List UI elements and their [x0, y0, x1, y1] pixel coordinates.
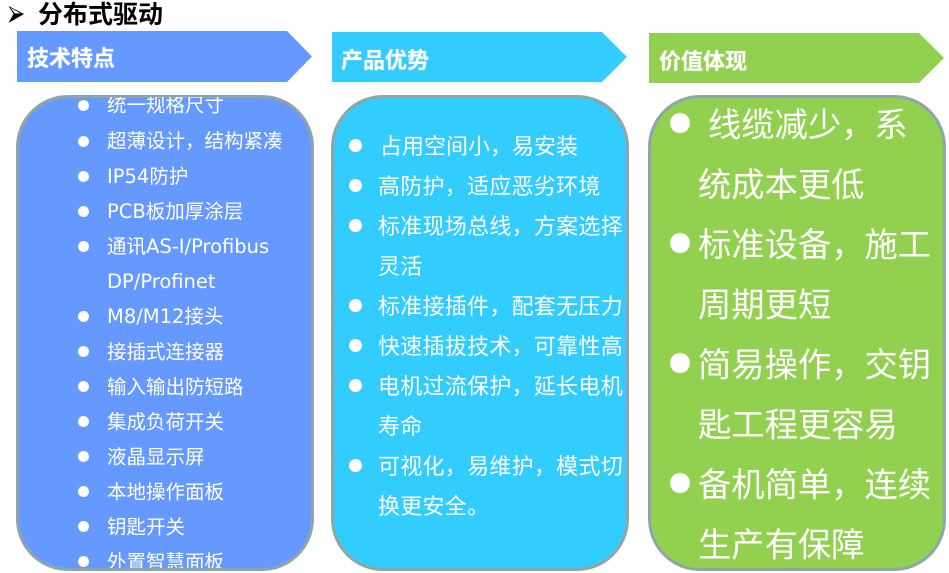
panel: 价值体现: 周期更短 — [698, 287, 831, 324]
panel: 产品优势: 可视化，易维护，模式切 — [378, 454, 623, 479]
panel: 价值体现: 备机简单，连续 — [698, 467, 931, 504]
panel: 技术特点: 钥匙开关 — [107, 516, 185, 538]
arrow header: 价值体现: 价值体现 — [659, 49, 747, 74]
panel: 技术特点: 本地操作面板 — [107, 481, 224, 503]
panel: 价值体现: 统成本更低 — [698, 167, 864, 204]
panel: 产品优势: 高防护，适应恶劣环境 — [378, 174, 601, 199]
panel: 技术特点: 输入输出防短路 — [107, 376, 244, 398]
panel: 技术特点: M8/M12接头 — [107, 305, 223, 328]
panel: 价值体现: 线缆减少，系 — [708, 107, 908, 144]
panel: 技术特点: PCB板加厚涂层 — [107, 200, 243, 223]
arrow header: 技术特点 — [17, 31, 312, 82]
panel: 价值体现: 简易操作，交钥 — [698, 347, 931, 384]
panel: 技术特点: 通讯AS-I/Profibus — [107, 235, 269, 258]
arrow header: 价值体现 — [649, 33, 944, 83]
panel: 产品优势: 快速插拔技术，可靠性高 — [378, 334, 623, 359]
panel: 技术特点: 集成负荷开关 — [107, 411, 224, 433]
panel: 产品优势: 标准现场总线，方案选择 — [378, 214, 623, 239]
panel: 技术特点: 液晶显示屏 — [107, 446, 205, 468]
icon: arrowhead bullet — [8, 6, 24, 23]
arrow header: 产品优势: 产品优势 — [341, 48, 429, 73]
panel: 价值体现: 匙工程更容易 — [698, 407, 898, 444]
panel: 技术特点: IP54防护 — [107, 165, 188, 188]
arrow header: 技术特点: 技术特点 — [27, 46, 115, 71]
panel: 产品优势: 灵活 — [378, 254, 423, 279]
panel: 产品优势: 标准接插件，配套无压力 — [378, 294, 623, 319]
title — [8, 1, 163, 29]
panel: 价值体现: 标准设备，施工 — [698, 227, 931, 264]
panel: 价值体现: 生产有保障 — [698, 527, 864, 564]
panel: 产品优势: 电机过流保护，延长电机 — [378, 374, 623, 399]
panel: 产品优势: 寿命 — [378, 414, 423, 439]
panel: 技术特点: 超薄设计，结构紧凑 — [107, 130, 283, 152]
panel: 技术特点: 接插式连接器 — [107, 341, 224, 363]
panel: 技术特点: DP/Profinet — [107, 270, 216, 293]
arrow header: 产品优势 — [332, 32, 627, 82]
title text: 分布式驱动 — [38, 1, 163, 29]
panel: 产品优势: 占用空间小，易安装 — [380, 134, 578, 159]
panel: 产品优势: 换更安全。 — [378, 494, 489, 519]
